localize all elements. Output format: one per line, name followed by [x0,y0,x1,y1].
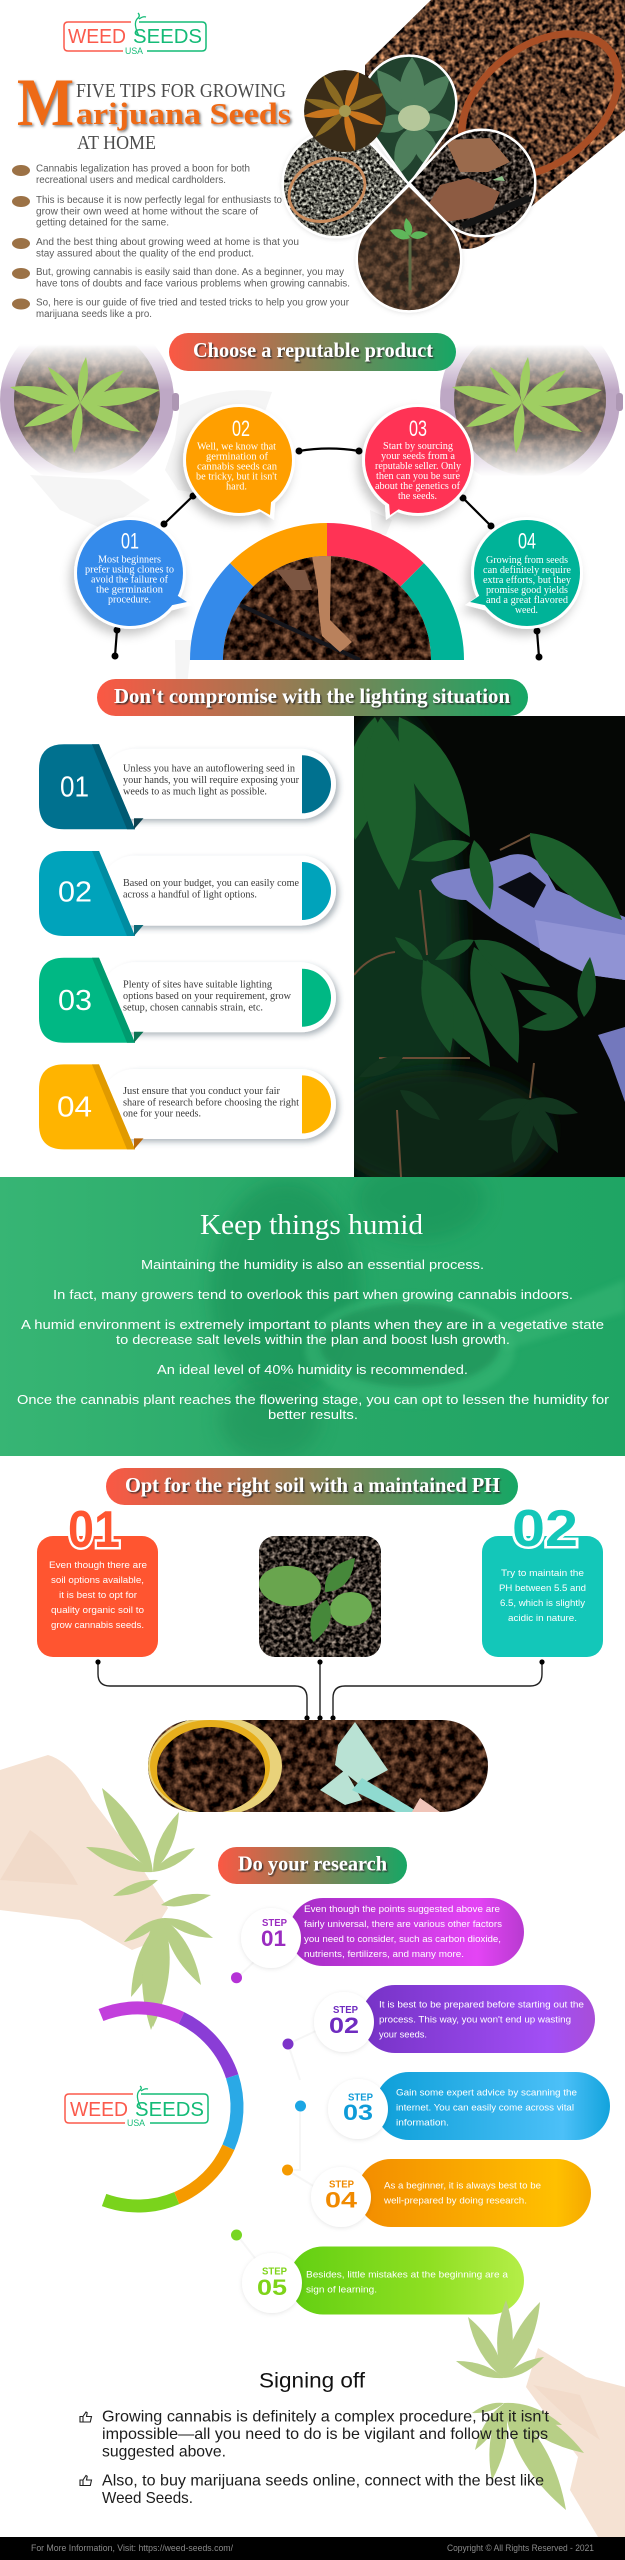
intro bullet list: Cannabis legalization has proved a boon for both [36,164,250,174]
footer: Copyright © All Rights Reserved - 2021 [447,2543,594,2554]
lighting card 04: share of research before choosing the right [123,1097,299,1108]
lighting card 03: setup, chosen cannabis strain, etc. [123,1002,263,1013]
intro bullet list: recreational users and medical cardholders. [36,175,226,186]
petal: hands in soil [410,130,540,240]
soil card 01 [37,1501,158,1657]
step 05: STEP [262,2266,287,2278]
logo: Weed Seeds USA [64,13,206,56]
bubble 03: Start by sourcing [383,441,453,452]
body text: Maintaining the humidity is also an essential process. [141,1257,484,1272]
intro bullet list: stay assured about the quality of the end product. [36,248,254,259]
step 01: you need to consider, such as carbon dioxide, [304,1934,501,1945]
connectors between bubbles [112,448,542,660]
lighting card 03: Plenty of sites have suitable lighting [123,980,273,991]
heading: soil: Opt for the right soil with a maintained PH [125,1473,500,1497]
hand holding leaf right [454,2298,625,2537]
bubble 04 [465,517,583,629]
bubble 03: 03 [409,416,427,441]
logo in ring: SEEDS [135,2099,204,2121]
bubble 02: 02 [232,416,250,441]
panel: keep things humid: to decrease salt levels within the plan and boost lush growth. [116,1332,510,1347]
signing off: suggested above. [102,2444,226,2461]
soil card 02: 6.5, which is slightly [500,1598,585,1609]
step 04: well-prepared by doing research. [383,2196,527,2206]
plant pot left faded [0,346,179,473]
circle: colourful leaf [302,70,387,152]
bubble 04: can definitely require [483,565,572,576]
step 03: 03 [343,2100,373,2125]
panel: keep things humid: In fact, many growers tend to overlook this part when growing cannabis indoors. [53,1287,573,1302]
bubble 04: weed. [515,605,538,616]
signing off: Weed Seeds. [102,2490,193,2507]
step 04: 04 [325,2188,358,2212]
ring chart [101,2008,237,2206]
intro bullet list: have tons of doubts and face various problems when growing cannabis. [36,278,350,289]
intro bullet list [12,164,350,320]
logo in ring: WEED [70,2099,128,2121]
thumb icon 1 [80,2412,92,2422]
soil card 02: acidic in nature. [508,1613,577,1624]
step 01: 01 [261,1926,286,1951]
lighting card 03: 03 [58,985,92,1017]
bubble 04: promise good yields [486,585,568,596]
bubble 03: then can you be sure [376,471,461,482]
title: M [17,64,74,140]
stems [354,835,534,1177]
bubble 01: Most beginners [98,554,161,566]
soil card 01: Even though there are [49,1560,147,1571]
bubble 01: 01 [121,528,139,554]
logo in ring: USA [127,2118,145,2128]
lighting card 03: options based on your requirement, grow [123,991,291,1002]
petal: gray seeds in spoon [280,130,410,240]
bubble 04: Growing from seeds [486,555,568,566]
step 02: STEP [333,2004,358,2016]
plant leaves left [8,356,161,454]
soil photo with pot and trowel [148,1716,488,1816]
step 04: As a beginner, it is always best to be [384,2180,541,2192]
panel: keep things humid [0,1160,625,1460]
heading: Do your research: Do your research [238,1852,387,1876]
bubble 01: prefer using clones to [85,564,174,576]
bubble 01: the germination [96,584,163,596]
bubble 01 [74,517,192,629]
intro bullet list: marijuana seeds like a pro. [36,309,152,320]
bubble 03: about the genetics of [375,481,461,492]
bubble 02 [183,404,295,520]
step 05: 05 [257,2275,287,2300]
step 02: process. This way, you won't end up wasting [379,2014,571,2026]
intro bullet list: So, here is our guide of five tried and tested tricks to help you grow your [36,298,350,308]
step 04 [311,2159,591,2227]
intro bullet list: grow their own weed at home without the scare of [36,206,258,217]
number 02: 02 [512,1500,578,1558]
heading: lighting [97,679,528,716]
step 03: information. [396,2118,449,2128]
logo: Weed Seeds USA: WEED [68,26,126,48]
intro bullet list: getting detained for the same. [36,218,169,229]
bottom dark leaves [373,1057,578,1162]
footer [0,2537,625,2560]
soil card 01: quality organic soil to [51,1605,144,1616]
background herbs and spoon [210,1180,360,1400]
step 02: It is best to be prepared before starting out the [379,2000,584,2010]
bubble 03: reputable seller. Only [375,461,461,472]
lower leaves [395,937,596,1067]
petal: cannabis plant [368,54,458,182]
soil card 01: grow cannabis seeds. [51,1620,144,1631]
step 02: your seeds. [379,2030,427,2040]
bubble 03: your seeds from a [381,451,456,462]
lighting card 01 [39,744,336,829]
title: AT HOME [77,132,156,154]
step dots [231,1958,320,2262]
bubble 02: Well, we know that [197,442,276,452]
signing off [80,2370,550,2507]
bubble 04: 04 [518,528,536,554]
sprout photo [257,1536,381,1657]
four petal photo collage [280,55,540,313]
lighting card 02: Based on your budget, you can easily come [123,878,299,889]
signing off: Also, to buy marijuana seeds online, connect with the best like [102,2472,544,2490]
soil photo with hand [223,556,431,660]
lighting card 04 [39,1064,336,1149]
heading: Choose a reputable product: Choose a reputable product [193,338,433,362]
panel: keep things humid: Once the cannabis plant reaches the flowering stage, you can opt to lessen the humidity for [17,1392,610,1407]
intro bullet list: And the best thing about growing weed at home is that you [36,237,299,248]
bubble 02: hard. [226,482,247,492]
hand holding leaf left [0,1755,215,2030]
intro bullet list: But, growing cannabis is easily said than done. As a beginner, you may [36,267,344,278]
intro bullet list: This is because it is now perfectly legal for enthusiasts to [36,195,282,206]
plant leaves right [450,356,603,454]
bubble 03 [362,404,474,520]
photo: gloved hand and cannabis leaves [354,716,625,1177]
step 03: Gain some expert advice by scanning the [396,2088,577,2098]
step 03: internet. You can easily come across vital [396,2102,574,2114]
bubble 02: cannabis seeds can [197,462,277,472]
glove [431,854,625,980]
panel: keep things humid: better results. [268,1407,358,1422]
lighting card 04: one for your needs. [123,1109,201,1120]
faint world map [30,390,392,695]
step 01: STEP [262,1917,287,1929]
diagonal seeds photo band [360,0,625,260]
connectors to soil photo [95,1659,545,1721]
lighting card 04: Just ensure that you conduct your fair [123,1086,280,1097]
title: arijuana Seeds [76,96,291,131]
step 03: STEP [348,2092,373,2104]
bubble 02: germination of [206,452,269,462]
plant pot right faded [440,346,623,474]
step 02: 02 [329,2013,359,2038]
step 02 [314,1985,595,2053]
logo: Weed Seeds USA: USA [125,46,143,56]
upper leaves [354,717,622,920]
lighting card 02: 02 [58,877,92,909]
half circle segmented chart with soil photo [190,523,464,660]
step 01 [241,1898,524,1968]
lighting card 01: your hands, you will require exposing your [123,775,299,786]
step 01: nutrients, fertilizers, and many more. [304,1949,464,1960]
bubble 02: be tricky, but it isn't [196,472,277,482]
step 01: fairly universal, there are various other factors [304,1919,502,1930]
second glove [598,1027,625,1102]
lighting card 02: across a handful of light options. [123,889,257,900]
number 01: 01 [68,1501,120,1559]
soil card 01: soil options available, [51,1575,144,1586]
step 01: Even though the points suggested above are [304,1904,500,1915]
bubble 01: procedure. [108,594,151,606]
signing off: impossible—all you need to do is be vigilant and follow the tips [102,2426,548,2443]
heading: Do your research [218,1847,407,1884]
lighting card 04: 04 [57,1092,92,1124]
wooden spoon of seeds [458,30,622,176]
bubble 01: avoid the failure of [91,574,169,586]
logo: Weed Seeds USA: SEEDS [133,26,202,48]
step 03 [328,2072,610,2140]
thumb icon 2 [80,2476,92,2486]
heading: lighting: Don't compromise with the lighting situation [114,684,510,708]
signing off: Growing cannabis is definitely a complex procedure, but it isn't [102,2409,550,2426]
leaf [84,1783,215,2030]
lighting card 01: weeds to as much light as possible. [123,786,267,797]
petal: seedling in gravel [355,185,463,313]
leaf [454,2298,589,2516]
soil card 02 [482,1500,603,1657]
title: FIVE TIPS FOR GROWING [76,80,286,102]
lighting card 01: 01 [60,772,89,804]
bubble 03: the seeds. [398,491,437,502]
heading: Keep things humid [200,1210,423,1241]
soil card 01: it is best to opt for [59,1590,137,1601]
step 05: sign of learning. [306,2284,377,2296]
soil card 02: PH between 5.5 and [499,1583,586,1594]
panel: keep things humid: A humid environment is extremely important to plants when they are in a vegetative state [21,1317,604,1332]
soil card 02: Try to maintain the [501,1568,584,1579]
heading: soil [106,1468,518,1505]
heading: Signing off [259,2370,365,2392]
footer: For More Information, Visit: https://weed-seeds.com/ [31,2543,233,2554]
bubble 04: and a great flavored [486,595,568,606]
logo in ring [65,2086,208,2128]
step 05 [242,2246,524,2314]
lighting card 01: Unless you have an autoflowering seed in [123,764,296,775]
step 05: Besides, little mistakes at the beginning are a [306,2270,509,2280]
lighting card 02 [39,851,336,936]
panel: keep things humid: An ideal level of 40% humidity is recommended. [157,1362,468,1377]
bubble 04: extra efforts, but they [483,575,571,586]
lighting card 03 [39,958,336,1043]
title [17,64,291,154]
seed bullets [12,165,30,310]
heading: Choose a reputable product [169,333,456,371]
step 04: STEP [329,2178,354,2190]
